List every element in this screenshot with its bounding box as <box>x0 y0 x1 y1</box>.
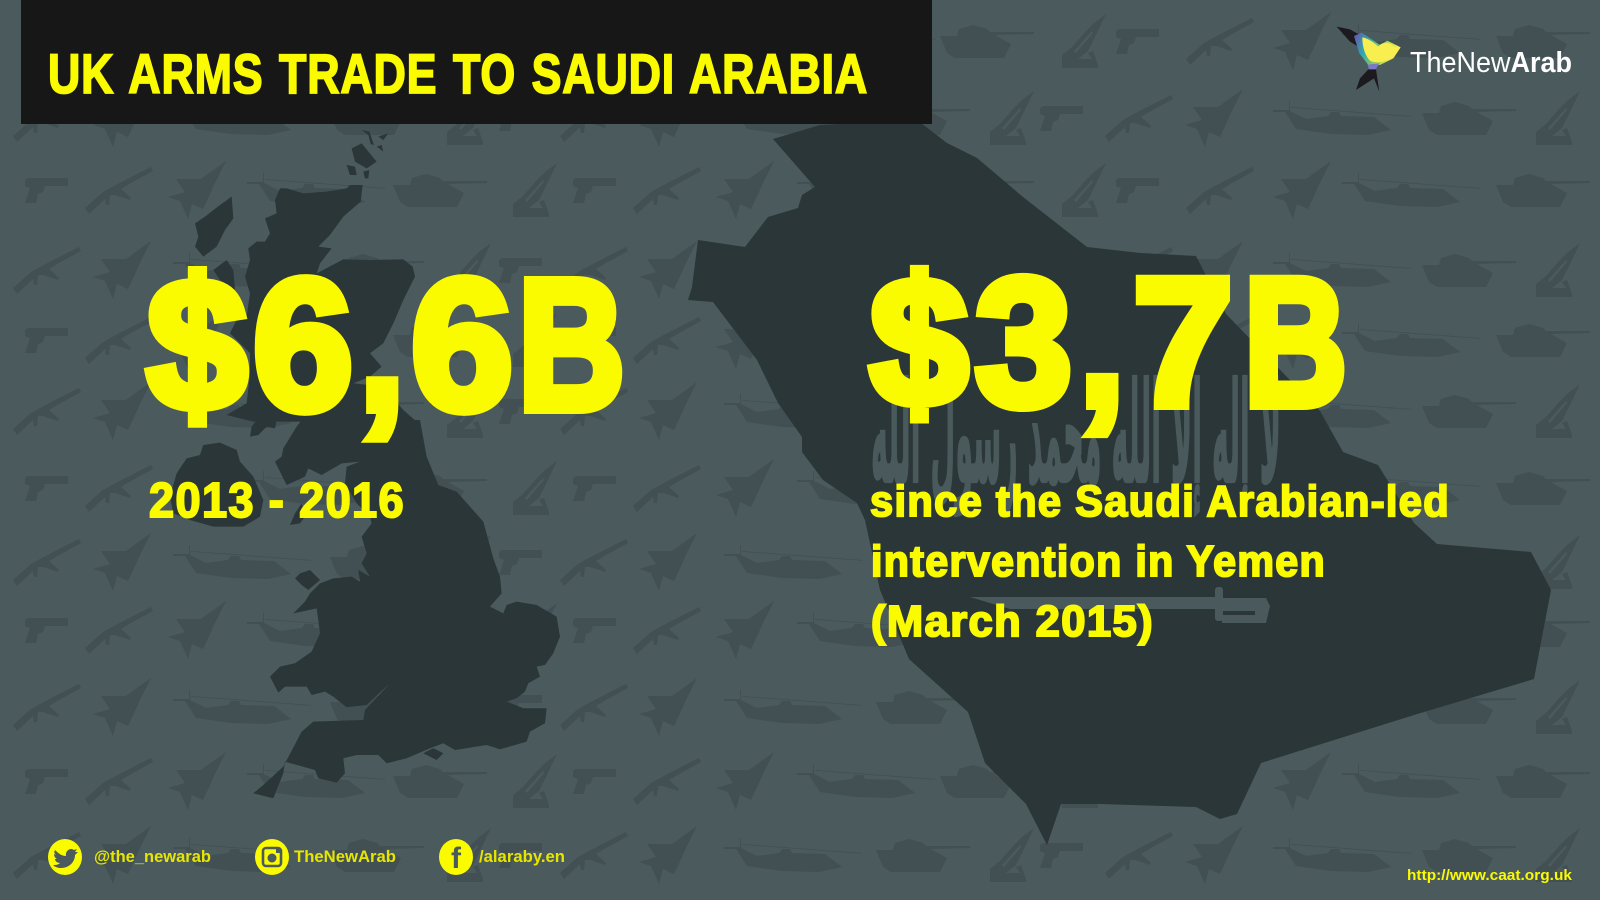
figure <box>870 240 1347 444</box>
map: United Kingdom <box>170 130 560 798</box>
figure: 6 <box>411 242 513 449</box>
social: facebook: /alaraby.en <box>479 847 565 866</box>
title bar <box>21 0 932 124</box>
stat description: since the Saudi Arabian-led <box>870 477 1450 526</box>
map: Saudi Arabia <box>688 120 1551 845</box>
figure: $ <box>147 242 247 449</box>
wordmark: TheNewArab <box>1410 47 1572 79</box>
icon: facebook: f <box>451 842 462 875</box>
figure: 3 <box>975 240 1072 444</box>
stat: Saudi total <box>870 240 1450 646</box>
flag: sword <box>970 587 1270 623</box>
source link: http://www.caat.org.uk <box>1407 868 1573 884</box>
social: twitter: @the_newarab <box>94 847 211 866</box>
figure: 7 <box>1133 240 1233 444</box>
icon: bird <box>1337 27 1401 92</box>
title: UK ARMS TRADE TO SAUDI ARABIA <box>48 42 868 105</box>
logo: The New Arab <box>1337 27 1572 92</box>
social: instagram <box>255 839 396 875</box>
stat period: 2013 - 2016 <box>149 474 405 528</box>
figure: 6 <box>253 242 353 449</box>
figure: B <box>1244 240 1347 444</box>
social: facebook <box>439 839 565 875</box>
social: twitter <box>48 839 211 875</box>
figure: , <box>1079 240 1125 444</box>
figure: B <box>518 242 625 449</box>
figure: $ <box>870 240 968 444</box>
icon: twitter <box>48 839 82 875</box>
icon: instagram <box>255 839 289 875</box>
Scotland <box>195 130 417 422</box>
social: instagram: TheNewArab <box>294 847 396 866</box>
stat description <box>870 477 1450 646</box>
England and Wales <box>170 420 560 798</box>
stat description: intervention in Yemen <box>871 537 1326 586</box>
stat description: (March 2015) <box>871 597 1154 646</box>
stat: UK total <box>147 242 625 528</box>
figure: , <box>359 242 405 449</box>
figure <box>147 242 625 449</box>
